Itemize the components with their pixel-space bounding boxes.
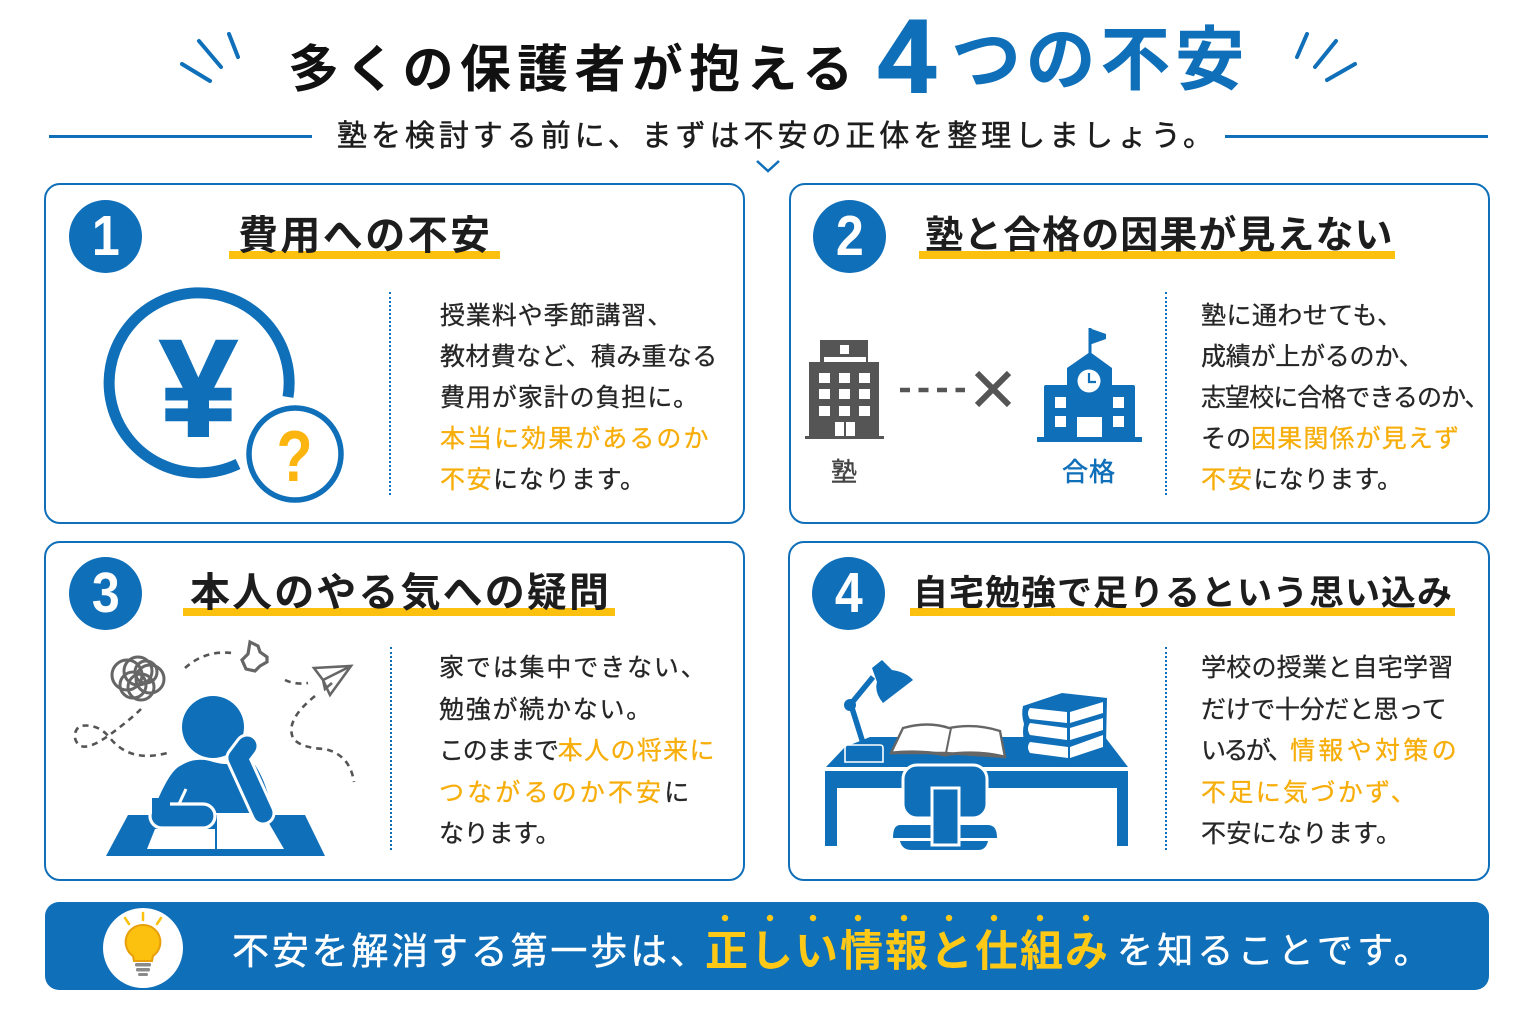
icon: yen coin with question mark: ? bbox=[276, 415, 313, 496]
panel: home study belief bbox=[788, 541, 1490, 881]
panel 4 text: いるが、情報や対策の bbox=[1201, 737, 1460, 765]
panel 3 text: 家では集中できない、 bbox=[439, 654, 708, 682]
panel 1 number bbox=[69, 200, 142, 273]
panel 1 heading: 費用への不安 bbox=[238, 214, 492, 258]
icon: light bulb bbox=[103, 908, 183, 988]
panel 1 text: 授業料や季節講習、 bbox=[440, 302, 673, 330]
title: lead text: 多くの保護者が抱える bbox=[288, 41, 859, 98]
panel 4 number: 4 bbox=[835, 561, 862, 625]
panel 2 text bbox=[1201, 302, 1489, 494]
icon: student thinking at desk bbox=[74, 640, 356, 856]
subtitle: 塾を検討する前に、まずは不安の正体を整理しましょう。 bbox=[337, 120, 1217, 153]
chevron bbox=[756, 160, 780, 173]
panel 4 text: 学校の授業と自宅学習 bbox=[1201, 654, 1454, 682]
panel 2 text: 不安になります。 bbox=[1201, 466, 1402, 494]
panel 2 heading underline bbox=[919, 251, 1395, 259]
title bbox=[288, 0, 1249, 115]
panel 3 heading: 本人のやる気への疑問 bbox=[190, 571, 611, 615]
panel 3 number bbox=[69, 557, 142, 630]
panel 2 text: 成績が上がるのか、 bbox=[1201, 343, 1423, 371]
panel 2 text: 塾に通わせても、 bbox=[1201, 302, 1403, 330]
panel 2 number bbox=[813, 200, 886, 273]
panel 3 text: 勉強が続かない。 bbox=[439, 696, 653, 724]
decorative burst lines right bbox=[1294, 32, 1358, 82]
panel 4 text: 不安になります。 bbox=[1201, 820, 1401, 848]
subtitle rule left bbox=[49, 135, 312, 138]
bottom banner bbox=[45, 902, 1489, 990]
panel 3 text: つながるのか不安に bbox=[439, 778, 692, 806]
banner text end: を知ることです。 bbox=[1117, 930, 1434, 971]
panel 3 text: なります。 bbox=[439, 820, 560, 848]
panel 2 heading: 塾と合格の因果が見えない bbox=[925, 215, 1394, 257]
panel 2 number: 2 bbox=[836, 204, 863, 268]
panel 4 number bbox=[812, 557, 885, 630]
panel 1 text bbox=[440, 302, 718, 494]
subtitle rule right bbox=[1225, 135, 1488, 138]
panel 3 divider bbox=[390, 647, 392, 850]
emphasis dots bbox=[722, 914, 1090, 922]
icon: desk with lamp, book and chair bbox=[825, 660, 1128, 850]
panel: motivation doubts bbox=[44, 541, 745, 881]
panel 1 divider bbox=[389, 292, 391, 495]
label: cram school: 塾 bbox=[831, 457, 857, 487]
title: big four: 4 bbox=[878, 0, 936, 115]
panel 4 text: だけで十分だと思って bbox=[1201, 696, 1446, 724]
panel 1 text: 教材費など、積み重なる bbox=[440, 343, 718, 371]
icon: cram school building, dashed line, cross, school bbox=[805, 328, 1142, 442]
icon: yen coin with question mark bbox=[104, 287, 344, 503]
panel 1 heading underline bbox=[229, 251, 500, 259]
panel 2 divider bbox=[1165, 292, 1167, 495]
panel: causality unseen bbox=[789, 183, 1490, 524]
panel 3 text: このままで本人の将来に bbox=[439, 737, 716, 765]
panel 2 text: その因果関係が見えず bbox=[1201, 425, 1460, 453]
panel 1 text: 不安になります。 bbox=[440, 466, 646, 494]
panel 4 heading underline bbox=[910, 608, 1455, 616]
panel 1 number: 1 bbox=[92, 204, 119, 268]
decorative burst lines left bbox=[180, 32, 240, 84]
label: passing: 合格 bbox=[1062, 457, 1116, 487]
banner emphasis text: 正しい情報と仕組み bbox=[705, 928, 1110, 976]
panel 3 number: 3 bbox=[92, 561, 119, 625]
panel 1 text: 本当に効果があるのか bbox=[440, 425, 711, 453]
panel 2 text: 志望校に合格できるのか、 bbox=[1201, 384, 1489, 412]
panel 4 heading: 自宅勉強で足りるという思い込み bbox=[913, 574, 1453, 613]
panel 3 heading underline bbox=[183, 608, 615, 616]
panel 4 text bbox=[1201, 654, 1460, 848]
icon: yen coin with question mark: ¥ bbox=[160, 312, 237, 466]
panel: cost anxiety bbox=[44, 183, 745, 524]
panel 1 text: 費用が家計の負担に。 bbox=[440, 384, 699, 412]
panel 3 text bbox=[439, 654, 716, 848]
title: highlighted text: つの不安 bbox=[951, 21, 1249, 99]
panel 4 text: 不足に気づかず、 bbox=[1201, 778, 1418, 806]
panel 4 divider bbox=[1165, 647, 1167, 850]
banner text lead: 不安を解消する第一歩は、 bbox=[232, 931, 710, 972]
